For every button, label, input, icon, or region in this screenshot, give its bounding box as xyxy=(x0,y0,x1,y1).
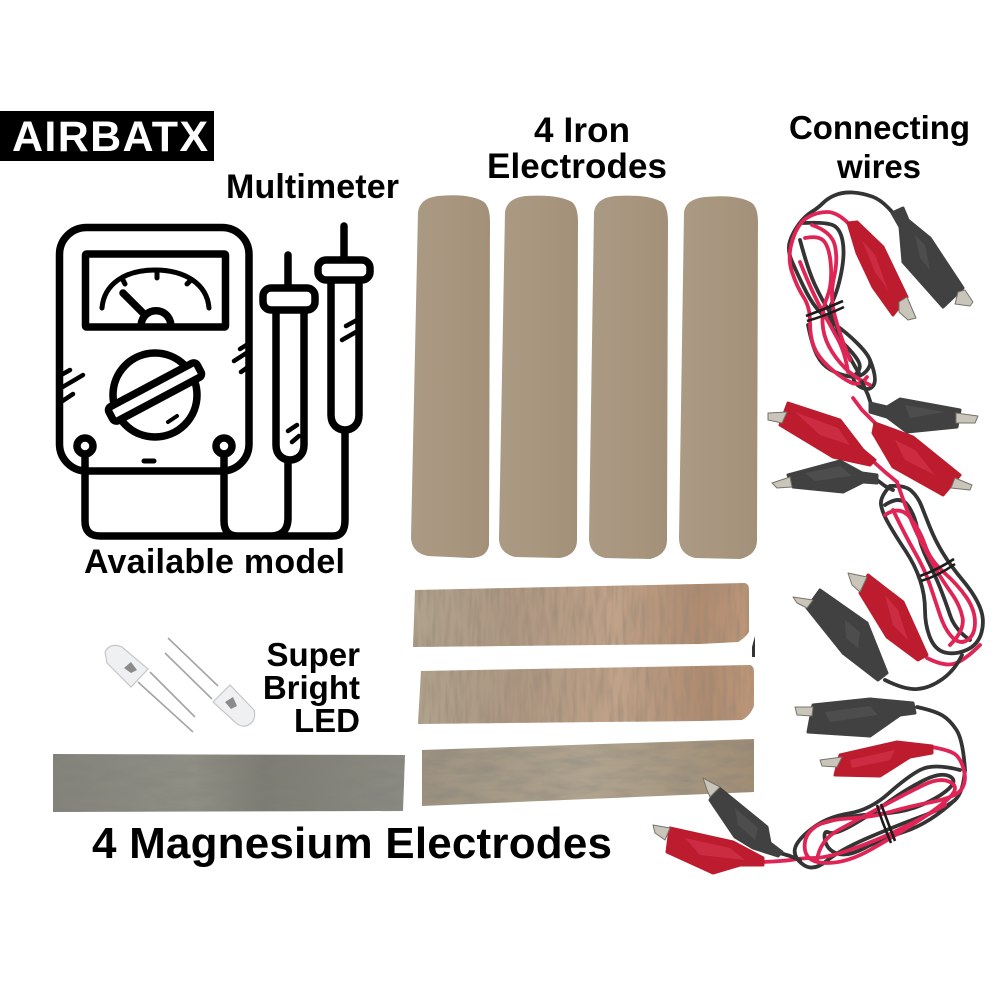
electrode strip 1 xyxy=(413,583,749,647)
clip: black middle xyxy=(870,399,978,432)
iron electrode 1 xyxy=(411,195,490,558)
copper electrodes xyxy=(413,583,755,806)
meter body xyxy=(60,228,249,471)
rotary knob xyxy=(107,353,203,437)
electrode strip 3 xyxy=(422,739,754,806)
top wire coil xyxy=(789,192,897,490)
label: Super Bright LED: Super xyxy=(266,636,360,673)
heading: 4 Iron Electrodes: Electrodes xyxy=(487,147,667,186)
left probe xyxy=(263,255,315,460)
iron electrode 4 xyxy=(679,196,758,559)
right LED xyxy=(165,638,255,726)
terminals xyxy=(77,438,232,461)
label: Super Bright LED xyxy=(263,636,360,739)
caption: Available model: Available model xyxy=(84,543,345,581)
meter dial screen xyxy=(86,254,226,327)
heading: 4 Iron Electrodes xyxy=(487,111,667,186)
iron electrode 2 xyxy=(499,196,578,558)
icon: multimeter xyxy=(60,226,370,536)
iron electrodes xyxy=(411,195,758,559)
heading: 4 Magnesium Electrodes: 4 Magnesium Electrodes xyxy=(92,819,612,868)
icon: super bright LEDs xyxy=(105,638,255,732)
label: Super Bright LED: Bright xyxy=(263,669,360,706)
bottom wire coil xyxy=(763,707,965,868)
logo: AIRBATX: AIRBATX xyxy=(12,113,208,161)
clip: black top xyxy=(892,208,973,307)
electrode strip 2 xyxy=(418,665,754,724)
clip: red middle left xyxy=(768,403,875,465)
small clip tip fragment xyxy=(752,636,755,657)
heading: Multimeter: Multimeter xyxy=(226,168,399,206)
clip: black lower xyxy=(795,699,915,736)
heading: Connecting wires xyxy=(789,109,970,185)
reflections xyxy=(61,344,248,402)
clip: red bottom xyxy=(653,825,763,873)
label: Super Bright LED: LED xyxy=(294,702,360,739)
right wire coil xyxy=(881,482,983,689)
connecting wires photo xyxy=(653,192,983,873)
clip: red top xyxy=(848,222,916,320)
iron electrode 3 xyxy=(589,196,668,559)
clip: red lower xyxy=(820,742,932,776)
magnesium electrode xyxy=(53,754,405,812)
clip: red right xyxy=(848,573,927,660)
right probe xyxy=(318,226,370,430)
left LED xyxy=(105,645,195,732)
test leads xyxy=(85,432,345,536)
heading: 4 Iron Electrodes: 4 Iron xyxy=(534,111,630,150)
clip: black bottom xyxy=(703,778,782,856)
clip: red middle right xyxy=(873,423,972,495)
clip: black right xyxy=(793,590,887,680)
heading: Connecting wires: Connecting xyxy=(789,109,970,146)
clip: black lower left xyxy=(772,461,877,492)
heading: Connecting wires: wires xyxy=(836,148,921,185)
